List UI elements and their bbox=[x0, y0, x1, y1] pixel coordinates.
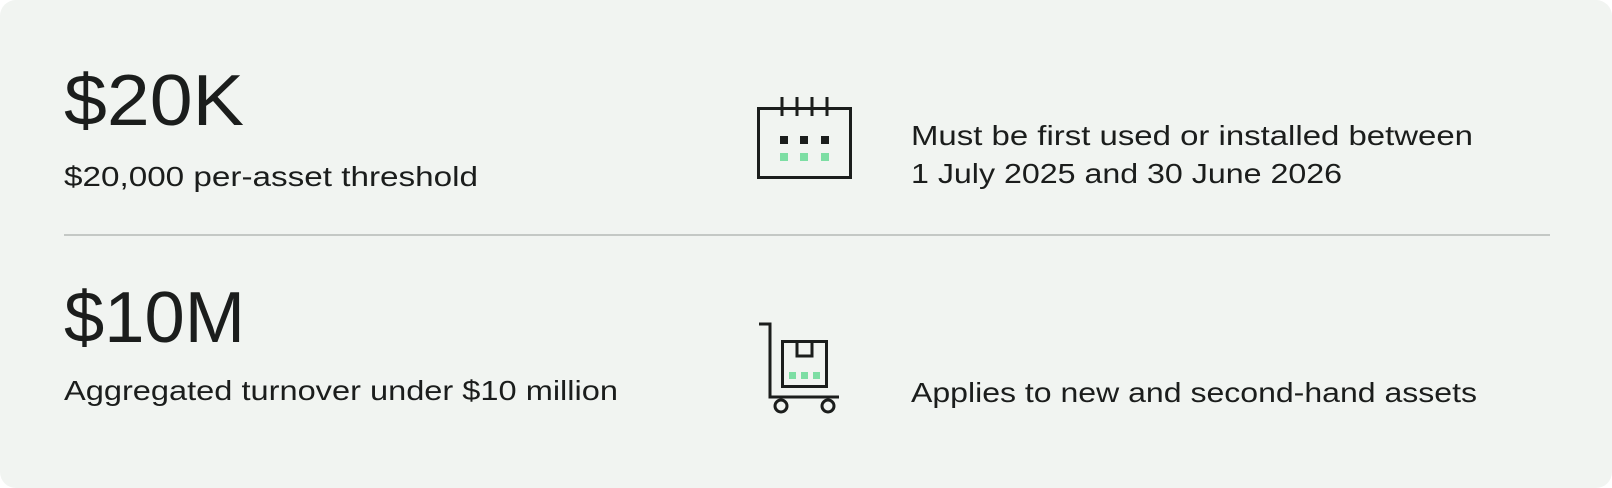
stat: $10M: $10M bbox=[64, 278, 245, 358]
stat: $10M: Aggregated turnover under $10 million bbox=[64, 375, 618, 406]
icon: calendar bbox=[758, 97, 850, 178]
divider bbox=[64, 234, 1550, 236]
stat: $20K bbox=[64, 61, 478, 192]
icon: cart with box bbox=[759, 324, 839, 412]
stat: $10M bbox=[64, 278, 618, 406]
text: date range: Must be first used or installed between bbox=[911, 120, 1473, 151]
text: date range: 1 July 2025 and 30 June 2026 bbox=[911, 158, 1342, 189]
text: date range bbox=[911, 120, 1473, 189]
stat: $20K: $20,000 per-asset threshold bbox=[64, 161, 478, 192]
stat: $20K: $20K bbox=[64, 61, 244, 141]
text: assets: Applies to new and second-hand assets bbox=[911, 377, 1477, 408]
